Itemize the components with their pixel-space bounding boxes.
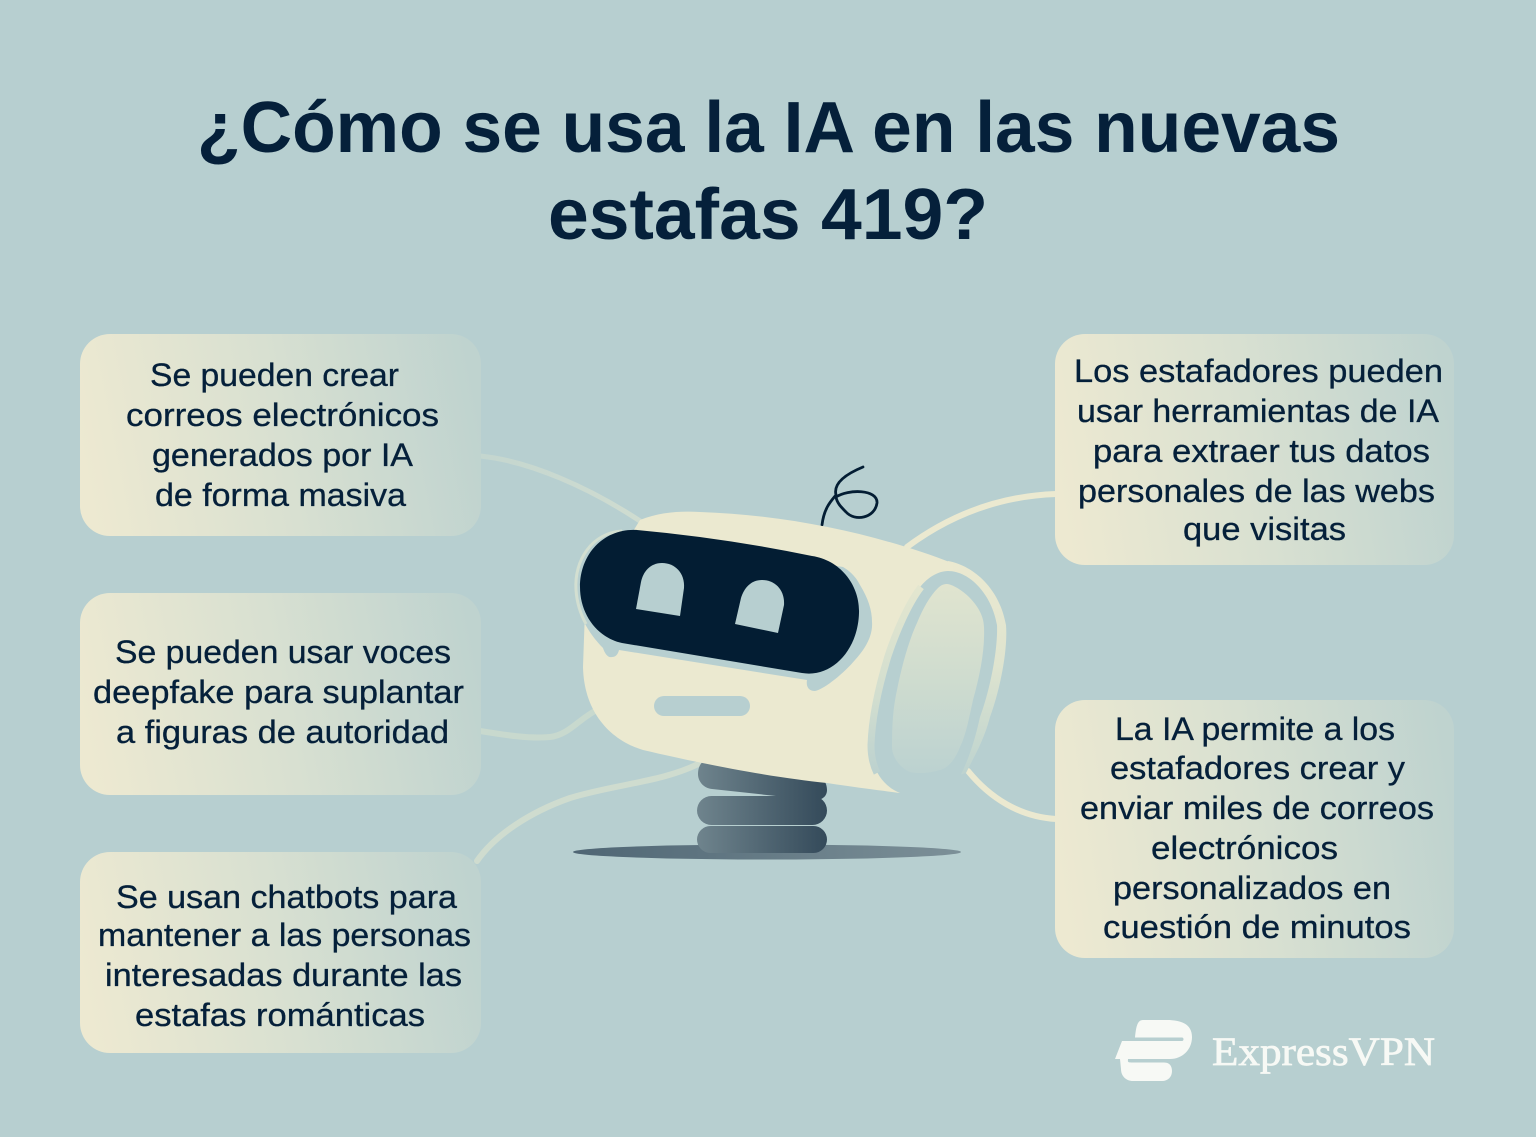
mouth (654, 696, 750, 716)
panel: correos masivos: de forma masiva (155, 477, 406, 513)
panel: correos masivos: Se pueden crear (150, 357, 399, 393)
panel: extraer datos: Los estafadores pueden (1074, 353, 1443, 389)
panel: correos masivos: generados por IA (152, 437, 414, 473)
side ring highlight (871, 587, 921, 773)
panel: extraer datos: usar herramientas de IA (1077, 393, 1440, 429)
eye left (636, 563, 684, 616)
panel: correos personalizados (1055, 700, 1454, 958)
panel: correos personalizados: La IA permite a los (1115, 711, 1395, 747)
panel: correos personalizados: estafadores crear y (1110, 750, 1405, 786)
head (583, 512, 985, 793)
panel: voces deepfake: a figuras de autoridad (116, 714, 449, 750)
wordmark: ExpressVPN (1212, 1029, 1435, 1074)
panel: extraer datos: personales de las webs (1078, 473, 1435, 509)
outer rim (880, 561, 1006, 793)
visor shadow (575, 530, 872, 691)
panel: chatbots: interesadas durante las (105, 957, 462, 993)
visor rim highlight (576, 531, 622, 624)
antenna (822, 467, 877, 525)
panel: correos personalizados: cuestión de minutos (1103, 909, 1411, 945)
side ring (870, 571, 997, 794)
side panel (892, 584, 984, 773)
panel: voces deepfake (80, 593, 481, 795)
panel: chatbots: Se usan chatbots para (116, 879, 457, 915)
panel: chatbots: mantener a las personas (98, 917, 471, 953)
panel: extraer datos: que visitas (1183, 511, 1346, 547)
panel: correos personalizados: electrónicos (1151, 830, 1338, 866)
eye right (735, 580, 784, 633)
ExpressVPN logo (1115, 1020, 1435, 1081)
panel: voces deepfake: deepfake para suplantar (93, 674, 464, 710)
robot illustration (573, 467, 1006, 860)
panel: correos personalizados: personalizados en (1113, 870, 1391, 906)
icon (1115, 1020, 1192, 1081)
title (197, 88, 1340, 255)
visor (580, 530, 859, 674)
panel: chatbots: estafas románticas (135, 997, 425, 1033)
panel: correos masivos (80, 334, 481, 536)
panel: voces deepfake: Se pueden usar voces (115, 634, 451, 670)
panel: extraer datos (1055, 334, 1454, 565)
panel: correos masivos: correos electrónicos (126, 397, 439, 433)
panel: correos personalizados: enviar miles de correos (1080, 790, 1434, 826)
panel: chatbots (80, 852, 481, 1053)
connector lines (477, 456, 1056, 861)
panel: extraer datos: para extraer tus datos (1093, 433, 1430, 469)
ground shadow (573, 844, 961, 860)
spring (697, 760, 827, 853)
title: estafas 419? (548, 175, 988, 255)
title: ¿Cómo se usa la IA en las nuevas (197, 88, 1340, 168)
